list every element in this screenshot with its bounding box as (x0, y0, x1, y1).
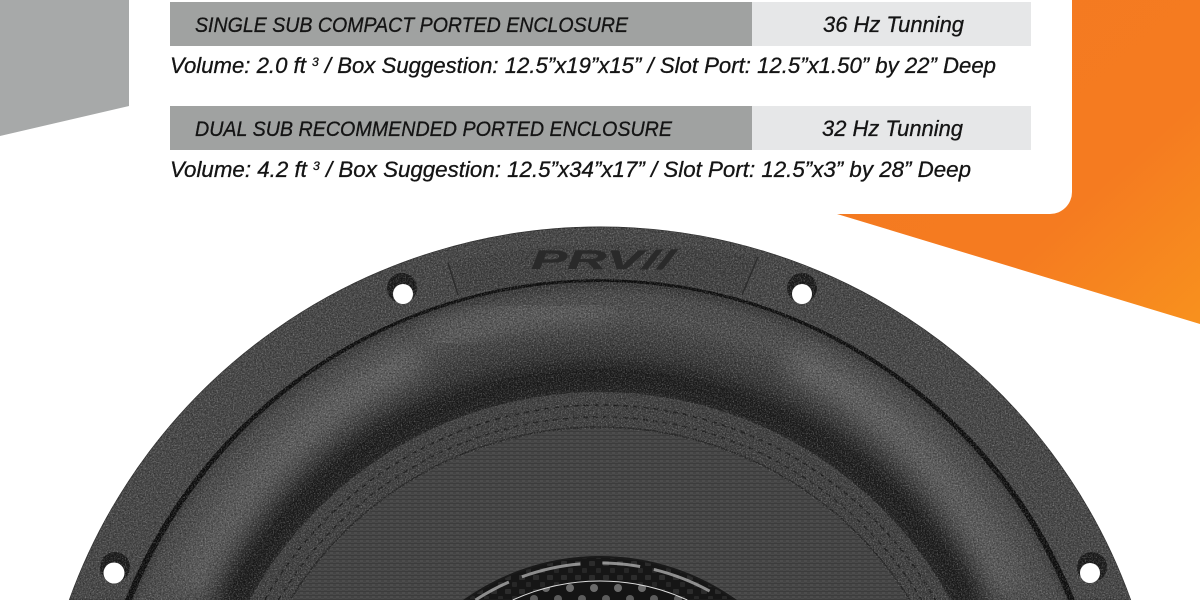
surround highlight top (430, 309, 610, 340)
spec line: single sub: / Box Suggestion: 12.5”x19”x15” / Slot Port: 12.5”x1.50” by 22” Deep (319, 53, 996, 78)
header bar: dual sub title: DUAL SUB RECOMMENDED PORTED ENCLOSURE (195, 118, 673, 141)
carbon fiber dust cap (465, 557, 735, 600)
logo tab recess (448, 244, 758, 295)
spec line: dual sub: Volume: 4.2 ft (170, 157, 305, 182)
rubber surround (132, 282, 1068, 600)
speaker frame flange (69, 227, 1131, 600)
tuning cell: 32 Hz: 32 Hz Tunning (822, 116, 964, 141)
spec line: dual sub: / Box Suggestion: 12.5”x34”x17” / Slot Port: 12.5”x3” by 28” Deep (320, 157, 971, 182)
orange background shape (837, 0, 1200, 324)
subwoofer photo illustration (69, 227, 1131, 600)
row: dual sub enclosure (170, 106, 1031, 182)
spec line: single sub: Volume: 2.0 ft (170, 53, 305, 78)
tuning cell: 32 Hz (752, 106, 1031, 150)
header bar: single sub title: SINGLE SUB COMPACT PORTED ENCLOSURE (195, 14, 629, 37)
header bar: dual sub title (170, 106, 752, 150)
surround highlight left (190, 360, 420, 600)
cone stitched edge (250, 392, 950, 600)
header bar: single sub title (170, 2, 752, 46)
tuning cell: 36 Hz (752, 2, 1031, 46)
spec line: dual sub: 3 (313, 159, 320, 173)
logo tab edges (448, 257, 758, 295)
tuning cell: 36 Hz: 36 Hz Tunning (823, 12, 965, 37)
surround shadow band (235, 379, 965, 600)
grain texture on frame, surround and cone lip (69, 227, 1131, 600)
row: single sub enclosure (170, 2, 1031, 78)
gray corner shape (0, 0, 129, 136)
spec line: single sub: 3 (312, 55, 319, 69)
surround highlight right (790, 360, 1010, 600)
mounting hole countersinks (100, 273, 1107, 582)
surround groove (125, 279, 1075, 600)
woven cone (292, 429, 908, 600)
white content panel (140, 0, 1072, 214)
PRV logo: PRV// (531, 245, 678, 275)
mounting hole openings (104, 284, 1100, 584)
